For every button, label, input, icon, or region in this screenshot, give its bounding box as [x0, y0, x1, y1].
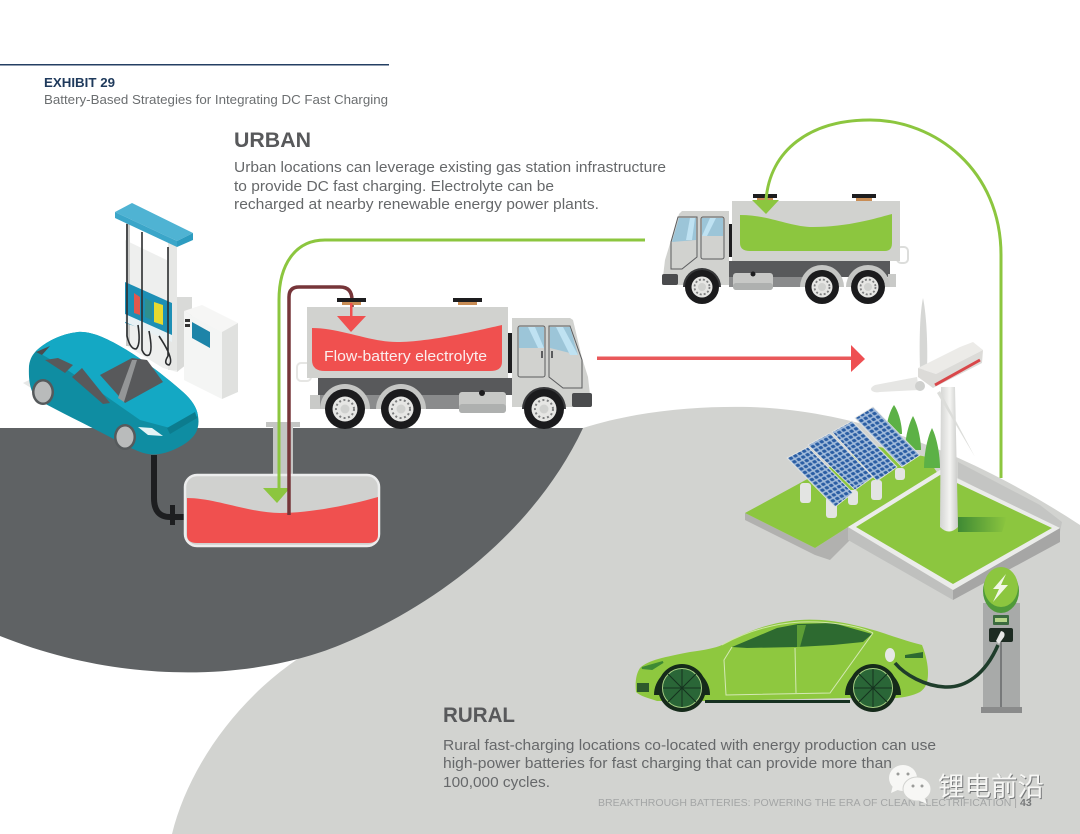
icon: trees [886, 405, 940, 468]
footer: 43 [1020, 797, 1032, 809]
rural description [443, 738, 936, 791]
urban description: to provide DC fast charging. Electrolyte can be [234, 179, 554, 195]
icon: teal car [23, 332, 198, 454]
charging cable [895, 645, 998, 687]
rural description: Rural fast-charging locations co-located with energy production can use [443, 738, 936, 754]
urban description [234, 160, 666, 213]
header rule and exhibit title: EXHIBIT 29 [44, 75, 115, 90]
urban description: Urban locations can leverage existing gas station infrastructure [234, 160, 666, 176]
arrow: green curve from renewable site to truck [752, 120, 1001, 478]
arrow: red line to renewable energy site [597, 345, 865, 372]
icon: solar panels [787, 407, 920, 518]
header rule and exhibit title: Battery-Based Strategies for Integrating DC Fast Charging [44, 92, 388, 107]
icon: charging station [981, 567, 1022, 713]
tank label: Flow-battery electrolyte [324, 348, 487, 365]
icon: fast charger cabinet [184, 305, 238, 399]
renewable energy site platform [745, 445, 1062, 600]
truck: green electrolyte tanker [662, 194, 908, 304]
rural description: 100,000 cycles. [443, 775, 550, 791]
underground electrolyte tank [185, 422, 379, 546]
arrow: brown pipe from tank to truck [289, 287, 352, 515]
rural heading: RURAL [443, 704, 515, 727]
footer: BREAKTHROUGH BATTERIES: POWERING THE ERA OF CLEAN ELECTRIFICATION | [598, 797, 1017, 809]
icon: wind turbine [871, 298, 983, 532]
watermark text: 锂电前沿 [938, 772, 1044, 802]
header rule and exhibit title [0, 64, 389, 107]
icon: wechat bubbles [889, 765, 931, 804]
icon: gas pump [115, 203, 193, 372]
rural description: high-power batteries for fast charging that can provide more than [443, 756, 892, 772]
underground pipe from tank to car [154, 455, 184, 525]
urban description: recharged at nearby renewable energy power plants. [234, 197, 599, 213]
arrow: green line from recharged truck to tank [263, 240, 645, 503]
truck: red electrolyte tanker [297, 298, 592, 429]
urban heading: URBAN [234, 129, 311, 152]
icon: green electric car [636, 620, 928, 712]
watermark text: 锂电前沿 [939, 773, 1045, 803]
panel: rural ground [172, 407, 1080, 834]
panel: urban ground [0, 428, 583, 672]
